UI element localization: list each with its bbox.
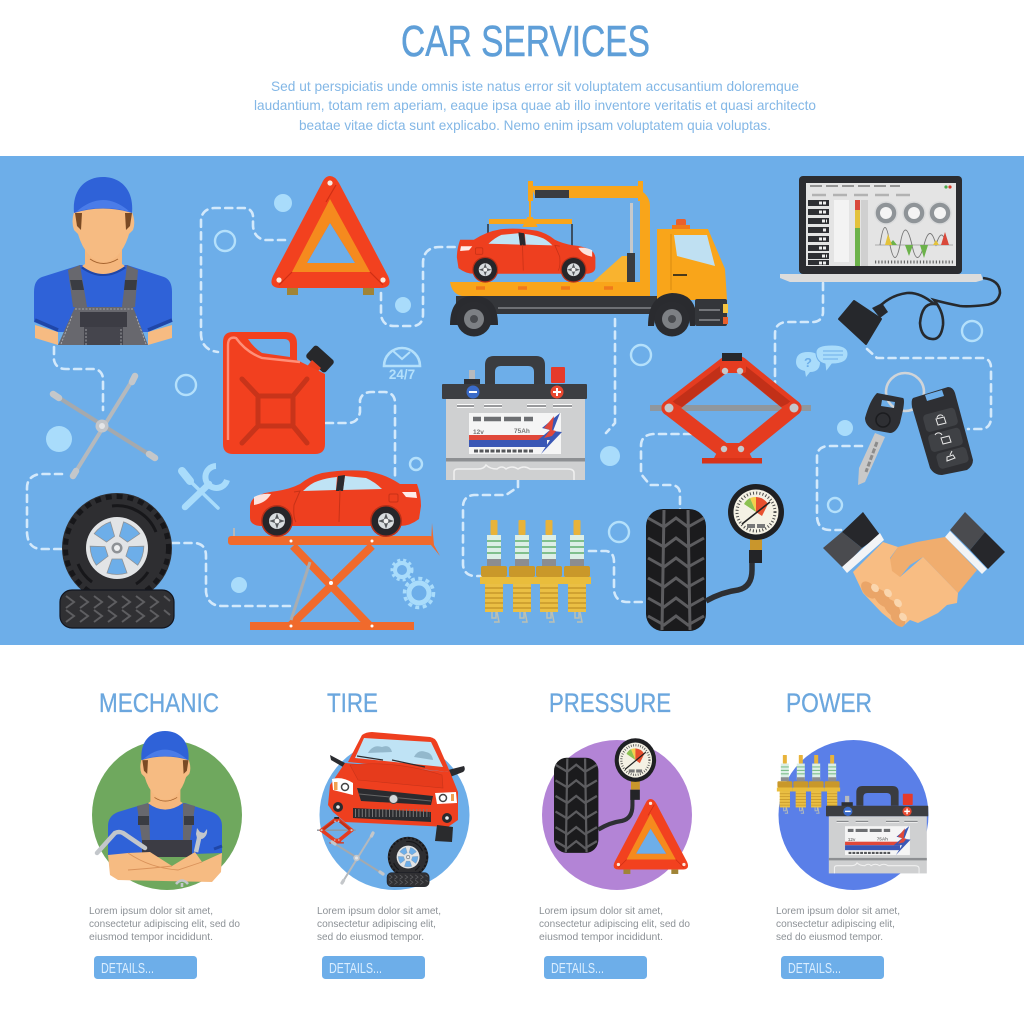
button: details power: [781, 956, 884, 979]
panel: pressure illustration: [542, 738, 692, 890]
button: details mechanic: DETAILS...: [101, 960, 154, 977]
text: power: sed do eiusmod tempor.: [776, 931, 883, 943]
icon: tire with alloy wheel: [60, 493, 174, 628]
intro text block: Sed ut perspiciatis unde omnis iste natus error sit voluptatem accusantium doloremque: [271, 78, 799, 94]
icon: warning triangle: [271, 176, 390, 295]
icon: handshake: [823, 512, 1005, 629]
heading: pressure: PRESSURE: [549, 688, 671, 718]
heading: tire: TIRE: [327, 688, 378, 718]
icon: car on lift: [228, 470, 440, 630]
button: details power: DETAILS...: [788, 960, 841, 977]
intro text block: laudantium, totam rem aperiam, eaque ipsa quae ab illo inventore veritatis et quasi architecto: [254, 97, 816, 113]
icon: tow truck with car: [450, 181, 728, 336]
text: mechanic: eiusmod tempor incididunt.: [89, 931, 213, 943]
text: pressure: Lorem ipsum dolor sit amet,: [539, 905, 663, 917]
icon: lug wrench: [53, 376, 155, 476]
text: power: [776, 905, 900, 943]
decorative dots and rings: [46, 194, 982, 593]
icon: chat bubbles: [796, 345, 848, 377]
icon: jerry can: [223, 332, 335, 454]
text: mechanic: consectetur adipiscing elit, sed do: [89, 918, 240, 930]
intro text block: beatae vitae dicta sunt explicabo. Nemo enim ipsam voluptatem quia voluptas.: [299, 117, 771, 133]
icon: tire tread with pressure gauge: [646, 484, 784, 631]
icon: 24/7 speedometer: 24/7: [389, 367, 415, 382]
text: power: Lorem ipsum dolor sit amet,: [776, 905, 900, 917]
button: details tire: DETAILS...: [329, 960, 382, 977]
button: details mechanic: [94, 956, 197, 979]
icon: laptop with diagnostic screen: [780, 176, 1000, 344]
text: tire: [317, 905, 441, 943]
dashed connector paths: [27, 208, 991, 606]
button: details tire: [322, 956, 425, 979]
icon: chat bubbles: ?: [804, 355, 812, 370]
text: pressure: consectetur adipiscing elit, sed do: [539, 918, 690, 930]
icon: 24/7 speedometer: [384, 348, 420, 382]
button: details pressure: DETAILS...: [551, 960, 604, 977]
text: mechanic: Lorem ipsum dolor sit amet,: [89, 905, 213, 917]
icon: gears: [392, 560, 434, 608]
panel: power illustration: [777, 740, 928, 890]
icon: tools: [182, 466, 227, 508]
button: details pressure: [544, 956, 647, 979]
text: tire: Lorem ipsum dolor sit amet,: [317, 905, 441, 917]
text: pressure: eiusmod tempor incididunt.: [539, 931, 663, 943]
panel: mechanic illustration: [92, 731, 242, 890]
heading: power: POWER: [786, 688, 872, 718]
text: power: consectetur adipiscing elit,: [776, 918, 895, 930]
icon: mechanic: [34, 177, 172, 345]
icon: car battery: [442, 356, 587, 480]
text: tire: consectetur adipiscing elit,: [317, 918, 436, 930]
heading: mechanic: MECHANIC: [99, 688, 219, 718]
icon: spark plugs: [480, 520, 591, 622]
blue service band: [0, 156, 1024, 645]
text: pressure: [539, 905, 690, 943]
title: CAR SERVICES: [401, 17, 650, 66]
icon: car keys: [858, 373, 973, 485]
panel: tire illustration: [317, 732, 470, 890]
text: mechanic: [89, 905, 240, 943]
icon: scissor jack: [650, 353, 811, 464]
intro text block: [254, 78, 816, 133]
text: tire: sed do eiusmod tempor.: [317, 931, 424, 943]
